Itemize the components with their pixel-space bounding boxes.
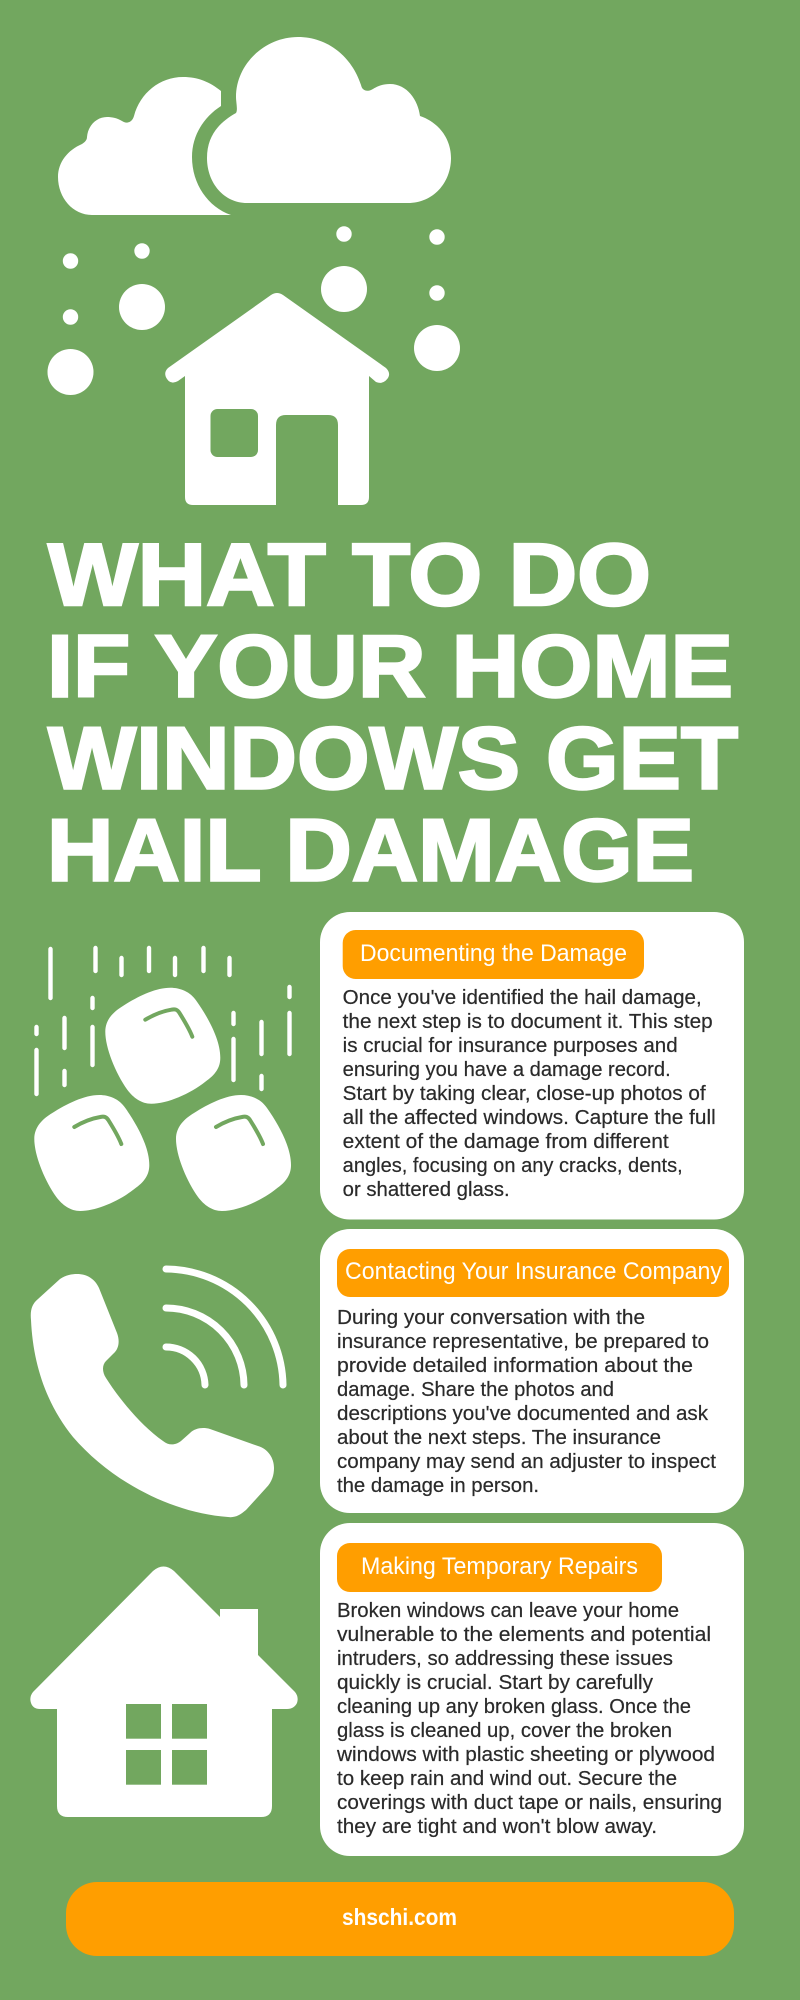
text block: documenting body: angles, focusing on any cracks, dents, [343, 1155, 683, 1177]
text block: documenting body: is crucial for insurance purposes and [343, 1035, 678, 1057]
text block: documenting body [343, 987, 716, 1201]
text block: documenting body: or shattered glass. [343, 1179, 510, 1201]
text block: repairs body: Broken windows can leave your home [337, 1600, 679, 1622]
text block: repairs body: vulnerable to the elements and potential [337, 1624, 711, 1646]
heading: documenting the damage [343, 930, 644, 979]
icon: hail streaks [36, 948, 290, 1094]
title: WINDOWS GET [48, 708, 738, 808]
text block: repairs body: they are tight and won't blow away. [337, 1816, 657, 1838]
text block: repairs body: glass is cleaned up, cover the broken [337, 1720, 672, 1742]
text block: documenting body: extent of the damage from different [343, 1131, 669, 1153]
footer: website bar: shschi.com [342, 1904, 457, 1930]
title: HAIL DAMAGE [47, 800, 694, 900]
text block: repairs body: quickly is crucial. Start by carefully [337, 1672, 653, 1694]
heading: contacting your insurance company: Contacting Your Insurance Company [345, 1258, 722, 1285]
text block: documenting body: all the affected windows. Capture the full [343, 1107, 716, 1129]
text block: contacting body: the damage in person. [337, 1475, 539, 1497]
icon: hail storm over house [48, 37, 460, 505]
panel: documenting the damage [320, 912, 744, 1220]
heading: making temporary repairs: Making Temporary Repairs [361, 1553, 638, 1580]
panel: making temporary repairs [320, 1523, 744, 1856]
text block: documenting body: Once you've identified the hail damage, [343, 987, 702, 1009]
heading: documenting the damage: Documenting the Damage [360, 940, 627, 967]
text block: documenting body: the next step is to document it. This step [343, 1011, 713, 1033]
text block: repairs body: to keep rain and wind out. Secure the [337, 1768, 677, 1790]
icon: left hailstone [34, 1095, 149, 1211]
text block: contacting body: descriptions you've documented and ask [337, 1403, 709, 1425]
footer: website bar [66, 1882, 734, 1956]
icon: right cloud [207, 37, 451, 203]
icon: hailstones [48, 226, 460, 395]
title: WHAT TO DO [48, 525, 651, 624]
text block: contacting body [337, 1307, 716, 1497]
icon: house with window [30, 1566, 298, 1817]
text block: documenting body: ensuring you have a damage record. [343, 1059, 671, 1081]
heading: making temporary repairs [337, 1543, 662, 1592]
icon: signal arcs [166, 1269, 283, 1385]
icon: top hailstone [105, 988, 220, 1104]
text block: repairs body: cleaning up any broken glass. Once the [337, 1696, 691, 1718]
title: IF YOUR HOME [47, 616, 733, 716]
panel: contacting your insurance company [320, 1229, 744, 1513]
text block: contacting body: During your conversation with the [337, 1307, 645, 1329]
text block: repairs body: intruders, so addressing these issues [337, 1648, 673, 1670]
icon: small house [165, 293, 389, 505]
icon: left cloud [58, 77, 231, 215]
icon: handset [31, 1274, 274, 1517]
text block: contacting body: insurance representative, be prepared to [337, 1331, 709, 1353]
text block: repairs body: coverings with duct tape or nails, ensuring [337, 1792, 722, 1814]
text block: contacting body: provide detailed information about the [337, 1355, 693, 1377]
text block: contacting body: damage. Share the photos and [337, 1379, 614, 1401]
icon: ringing telephone [31, 1269, 283, 1517]
title [47, 525, 738, 900]
text block: repairs body: windows with plastic sheeting or plywood [336, 1744, 715, 1766]
text block: contacting body: about the next steps. The insurance [337, 1427, 661, 1449]
heading: contacting your insurance company [337, 1249, 729, 1297]
text block: documenting body: Start by taking clear, close-up photos of [343, 1083, 706, 1105]
icon: falling hailstones [34, 948, 291, 1211]
text block: repairs body [336, 1600, 722, 1838]
icon: right hailstone [176, 1095, 291, 1211]
text block: contacting body: company may send an adjuster to inspect [337, 1451, 716, 1473]
